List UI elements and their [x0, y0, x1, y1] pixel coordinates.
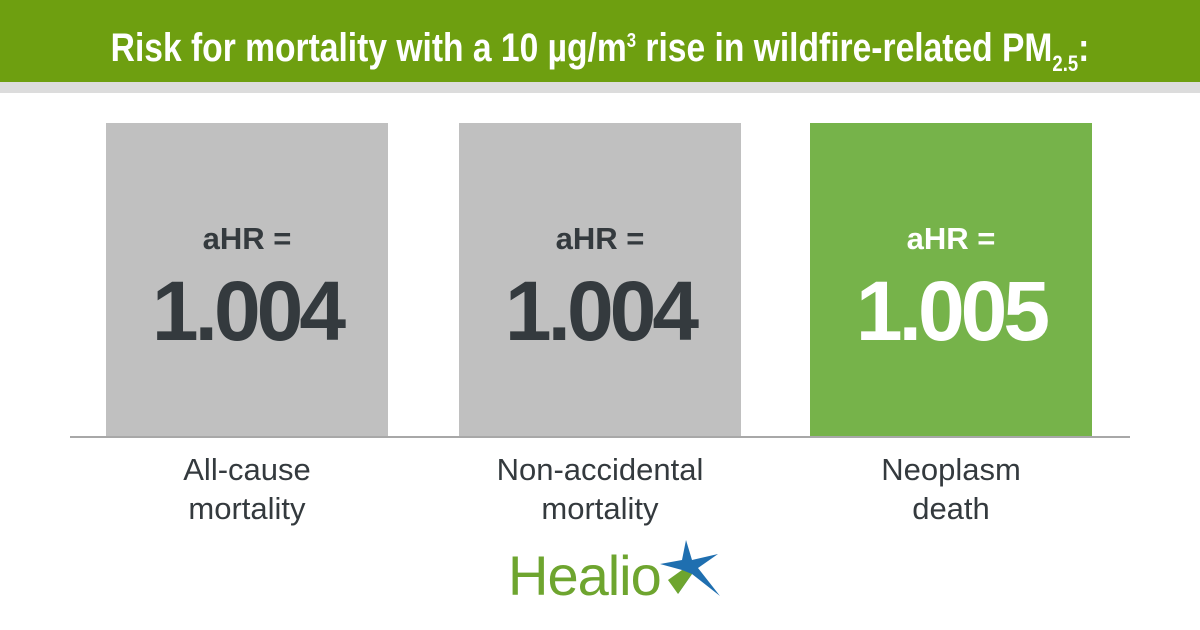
icon: star: [660, 540, 720, 596]
label: non-accidental: Non-accidental: [497, 452, 703, 487]
panel: all-cause: aHR =: [203, 221, 291, 256]
label: all-cause: All-cause: [183, 452, 311, 487]
logo: Healio: [508, 540, 720, 607]
label: neoplasm: [881, 452, 1021, 526]
logo: Healio: Healio: [508, 544, 661, 607]
panel: neoplasm: aHR =: [907, 221, 995, 256]
label: all-cause: [183, 452, 311, 526]
panel: all-cause: 1.004: [152, 264, 342, 358]
panel: neoplasm: 1.005: [856, 264, 1046, 358]
label: neoplasm: Neoplasm: [881, 452, 1021, 487]
label: non-accidental: mortality: [541, 491, 659, 526]
label: neoplasm: death: [912, 491, 990, 526]
header bar: [0, 0, 1200, 82]
label: all-cause: mortality: [188, 491, 306, 526]
panel: non-accidental: [459, 123, 741, 436]
panel: all-cause: [106, 123, 388, 436]
panel: neoplasm: [810, 123, 1092, 436]
panel: non-accidental: 1.004: [505, 264, 695, 358]
label: non-accidental: [497, 452, 703, 526]
title: Risk for mortality with a 10 µg/m3 rise in wildfire-related PM2.5:: [111, 26, 1089, 76]
panel: non-accidental: aHR =: [556, 221, 644, 256]
